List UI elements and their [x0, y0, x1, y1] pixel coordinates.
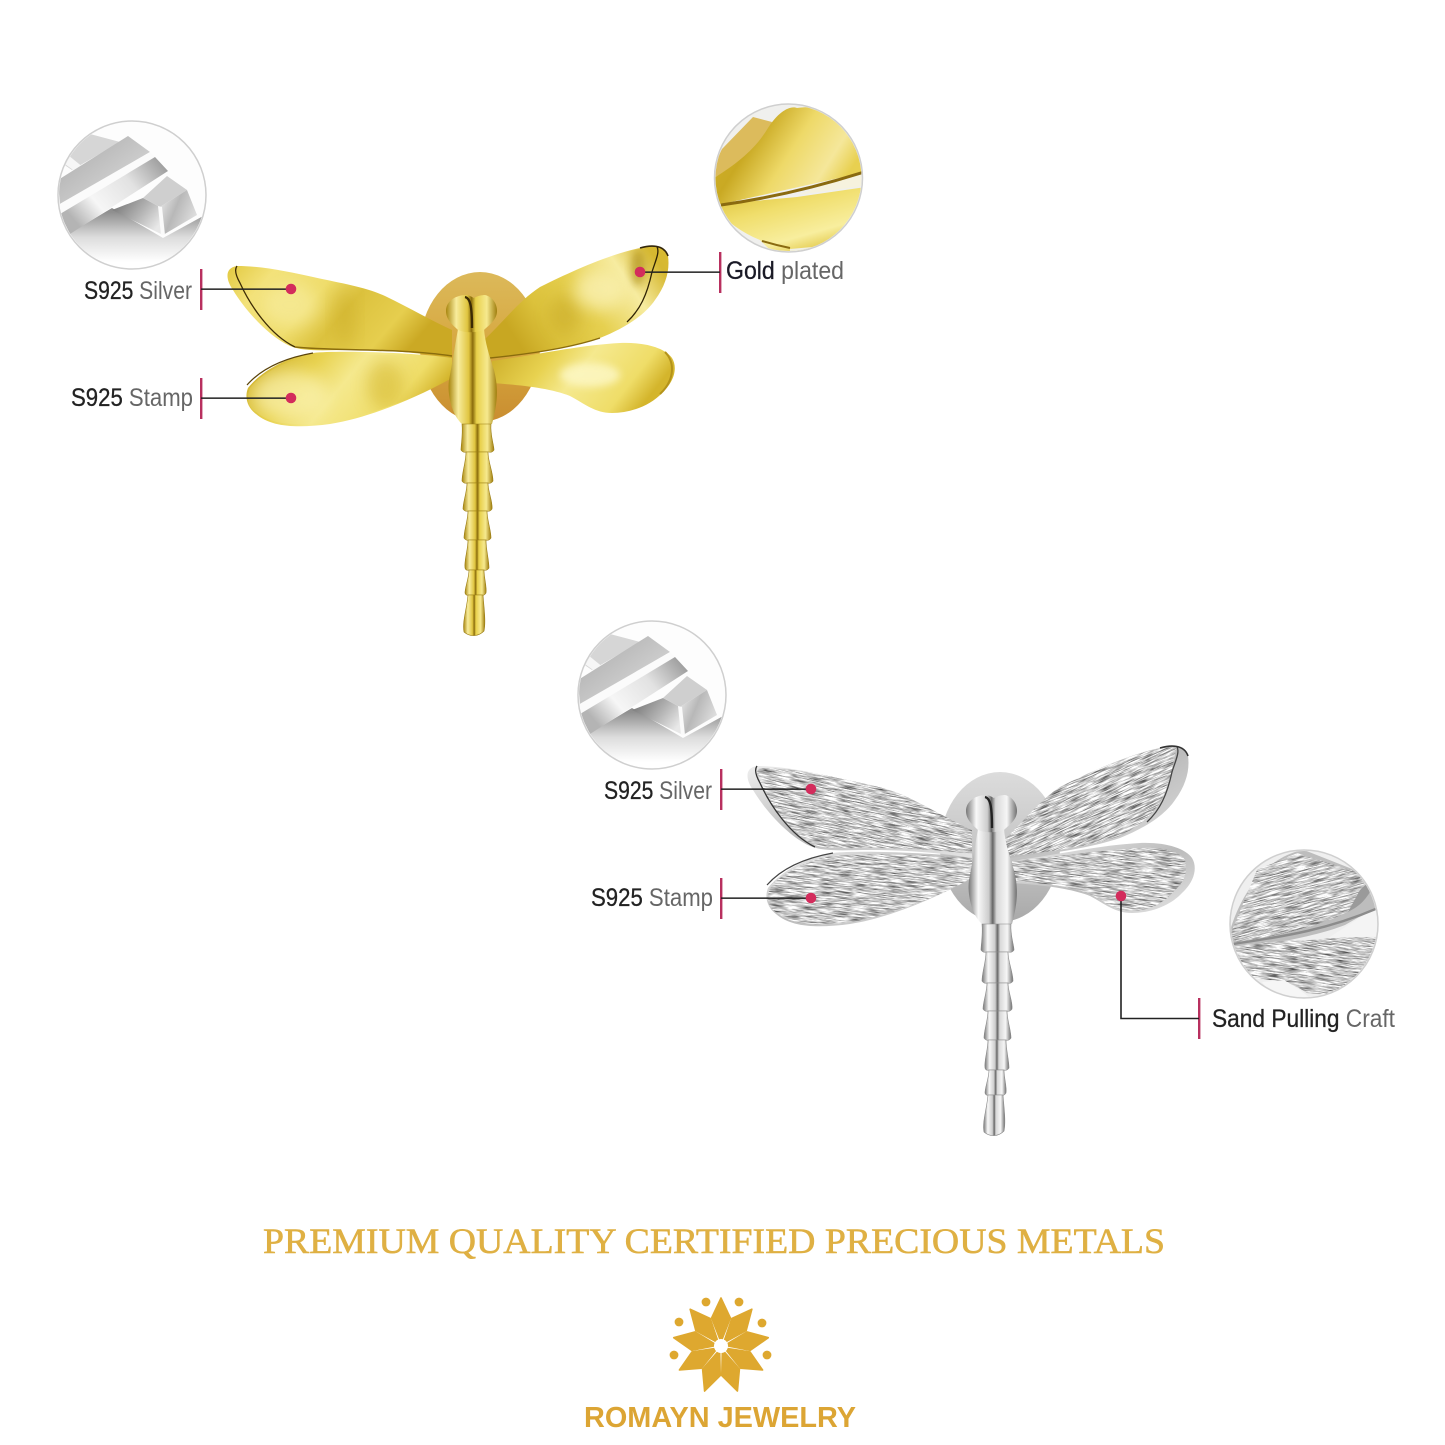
logo: brand name: ROMAYN JEWELRY: [584, 1402, 856, 1434]
label: Sand Pulling Craft: [1116, 891, 1395, 1039]
label: S925 Silver (silver): [604, 769, 816, 810]
backing disc: [420, 272, 540, 422]
label: S925 Silver (gold): [84, 269, 296, 310]
lower right wing: [1012, 842, 1195, 913]
lower right wing: [492, 343, 675, 413]
label: Gold plated: Gold plated: [726, 257, 844, 285]
gold dragonfly product: [227, 246, 675, 636]
logo: flower emblem: [670, 1298, 771, 1394]
upper right wing: [484, 246, 668, 358]
title: PREMIUM QUALITY CERTIFIED PRECIOUS METALS: [263, 1221, 1165, 1261]
label: Sand Pulling Craft: Sand Pulling Craft: [1212, 1005, 1395, 1033]
label: S925 Silver (gold): S925 Silver: [84, 277, 192, 305]
sand texture inset: [1229, 849, 1379, 999]
gold texture inset: [712, 104, 866, 260]
upper left wing: [748, 766, 972, 858]
upper left wing: [227, 266, 452, 358]
label: S925 Silver (silver): S925 Silver: [604, 777, 712, 805]
label: S925 Stamp (gold): S925 Stamp: [71, 384, 193, 412]
lower left wing: [766, 852, 972, 926]
body and head: [966, 795, 1017, 924]
label: S925 Stamp (silver): [591, 878, 816, 919]
lower left wing: [246, 352, 452, 426]
backing disc: [940, 772, 1060, 922]
segmented tail: [981, 924, 1014, 1136]
upper right wing: [1006, 745, 1189, 856]
label: Gold plated: [635, 252, 844, 293]
silver bars inset: gold variant: [56, 121, 206, 272]
label: S925 Stamp (gold): [71, 378, 296, 419]
body and head: [446, 295, 497, 424]
silver dragonfly product: [704, 652, 1259, 1136]
segmented tail: [461, 424, 494, 636]
silver bars inset: silver variant: [576, 621, 726, 772]
label: S925 Stamp (silver): S925 Stamp: [591, 884, 713, 912]
